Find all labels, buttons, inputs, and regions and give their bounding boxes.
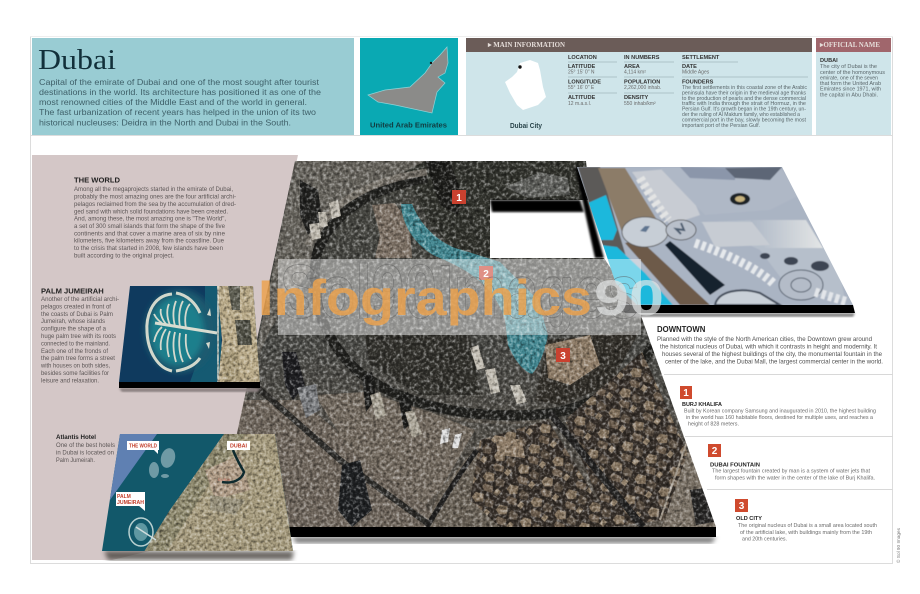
label: dubai: DUBAI xyxy=(230,444,248,450)
fronds xyxy=(154,301,191,362)
photo: downtown Dubai aerial block xyxy=(210,155,730,537)
body: the world: Among all the megaprojects started in the emirate of Dubai, xyxy=(74,187,233,193)
header: official name: ▸OFFICIAL NAME xyxy=(819,40,880,49)
dark skylights xyxy=(760,253,770,259)
body: Atlantis Hotel: in Dubai is located on xyxy=(56,450,114,456)
title: Dubai xyxy=(38,44,116,76)
column: settlement xyxy=(682,55,808,129)
heading: Dubai Fountain: DUBAI FOUNTAIN xyxy=(710,462,760,468)
official name text xyxy=(820,58,886,98)
column: in numbers: AREA xyxy=(624,64,640,70)
label: the world xyxy=(127,441,159,454)
panel: left pink background xyxy=(32,155,298,560)
column: in numbers: IN NUMBERS xyxy=(624,55,660,61)
promenade xyxy=(598,168,656,231)
body: downtown: Planned with the style of the North American cities, the Downtown grew around xyxy=(657,337,872,343)
official name text: that form the United Arab xyxy=(820,81,881,87)
body: palm jumeirah: the palm tree forms a street xyxy=(41,356,115,362)
watermark: Infographics xyxy=(258,270,592,326)
column: location: 55° 16' 0'' E xyxy=(568,85,595,91)
road top arc xyxy=(315,178,652,415)
body: downtown: houses several of the highest buildings of the city, the monumental fountain in the xyxy=(662,352,883,358)
label: palm jumeirah: JUMEIRAH xyxy=(117,500,144,506)
photo: Dubai Mall block xyxy=(570,160,860,313)
column: settlement: Persian Gulf. It's growth began in the 19th century, un- xyxy=(682,107,806,113)
column: settlement: DATE xyxy=(682,64,697,70)
body: palm jumeirah: pelagos created in front of xyxy=(41,304,111,310)
map label: United Arab Emirates xyxy=(370,120,447,130)
label: palm jumeirah: PALM xyxy=(117,494,131,500)
body: Old City: of the artificial lake, with buildings mainly from the 19th xyxy=(740,530,872,536)
intro text: destinations in the world. Its architecture has positioned it as one of the xyxy=(39,87,321,97)
body: Burj Khalifa xyxy=(684,408,876,428)
body: Burj Khalifa: Built by Korean company Samsung and inaugurated in 2010, the highest building xyxy=(684,408,876,414)
body: palm jumeirah xyxy=(40,297,119,384)
credit: © Sol 90 Images xyxy=(895,527,901,563)
heading: Burj Khalifa: BURJ KHALIFA xyxy=(682,402,723,408)
body: palm jumeirah: the coasts of Dubai is Palm xyxy=(41,312,113,318)
marker 2 on photo: 2 xyxy=(483,269,489,280)
body: palm jumeirah: huge palm tree with its roots xyxy=(41,334,116,340)
map label: Dubai City xyxy=(510,121,543,130)
column: location: 25° 15' 0'' N xyxy=(568,70,595,76)
body: Atlantis Hotel xyxy=(56,443,115,464)
body: Dubai Fountain: form shapes with the water in the center of the lake of Burj Khalifa. xyxy=(715,476,875,482)
body: the world xyxy=(74,187,236,259)
old city buildings xyxy=(495,335,600,458)
watermark: 90 xyxy=(594,270,664,326)
text block: Atlantis Hotel xyxy=(56,434,115,464)
body: Burj Khalifa: in the world has 160 habitable floors, destined for multiple uses, and reaches a xyxy=(686,415,873,421)
body: palm jumeirah: connected to the mainland. xyxy=(41,341,110,347)
body: downtown: center of the lake, and the Dubai Mall, the largest commercial center in the world. xyxy=(665,360,883,366)
icon: Dubai city map xyxy=(505,60,546,110)
body: the world: probably the most amazing ones are the four artificial archi- xyxy=(74,194,236,200)
column: location: LATITUDE xyxy=(568,64,596,70)
column: settlement: The first settlements in this coastal zone of the Arabic xyxy=(682,85,808,91)
official name text: Emirates since 1971, with xyxy=(820,86,881,92)
column: in numbers: POPULATION xyxy=(624,80,660,86)
body: palm jumeirah: Another of the artificial archi- xyxy=(41,297,119,303)
item 2: Dubai Fountain xyxy=(708,444,875,482)
block side xyxy=(217,527,716,537)
curved mall roofs xyxy=(632,168,700,225)
column: in numbers: 2,262,000 inhab. xyxy=(624,85,661,91)
body: the world: kilometers, five kilometers away from the coastline. Due xyxy=(74,239,225,245)
land xyxy=(217,286,262,384)
marker 3 on photo: 3 xyxy=(560,351,566,362)
body: Old City: and 20th centuries. xyxy=(742,536,787,542)
heading: Old City: OLD CITY xyxy=(736,516,762,522)
official name text: center of the homonymous xyxy=(820,70,886,76)
round roofs xyxy=(622,217,668,247)
body: palm jumeirah: Jumeirah, whose islands xyxy=(41,319,105,325)
column: settlement: important port of the Persian Gulf. xyxy=(682,123,760,129)
body: Burj Khalifa: height of 828 meters. xyxy=(688,422,739,428)
tower shadows xyxy=(425,161,462,215)
text block: the world xyxy=(74,176,236,259)
body: the world: ged sand with which solid foundations have been created. xyxy=(74,209,228,215)
number badge 1: 1 xyxy=(683,388,689,399)
body: palm jumeirah: leisure and relaxation. xyxy=(41,378,99,384)
photo: regional map block: DUBAI xyxy=(218,477,230,482)
column: location xyxy=(568,55,617,107)
column: settlement: commercial port in the bay, slowly becoming the most xyxy=(682,117,807,123)
number badge 3: 3 xyxy=(739,501,745,512)
panel: official name xyxy=(816,38,891,135)
body: palm jumeirah: with houses on both sides, xyxy=(40,364,110,370)
column: settlement: peninsula have their origin in the medieval age thanks xyxy=(682,90,807,96)
icon: UAE map shape xyxy=(368,47,448,113)
body: Atlantis Hotel: One of the best hotels xyxy=(56,443,115,449)
body: downtown: the historical nucleus of Dubai, with which it contrasts in height and modernity. It xyxy=(660,344,877,350)
number badge 2: 2 xyxy=(712,446,718,457)
number badge 3 xyxy=(735,499,748,512)
column: location: LOCATION xyxy=(568,55,597,61)
parking xyxy=(505,172,570,198)
column: settlement: to the production of pearls and the dense commercial xyxy=(682,96,806,102)
column: in numbers xyxy=(624,55,674,107)
heading: Atlantis Hotel: Atlantis Hotel xyxy=(56,434,96,441)
label: the world: THE WORLD xyxy=(129,444,157,450)
text block: downtown xyxy=(657,325,883,366)
low rise district xyxy=(565,352,700,527)
watermark: Sol90Images xyxy=(280,250,640,335)
official name text: The city of Dubai is the xyxy=(820,64,877,70)
text block: palm jumeirah xyxy=(40,286,119,384)
panel: main information xyxy=(466,38,812,135)
body: palm jumeirah: Each one of the fronds of xyxy=(41,349,108,355)
number badge 2 xyxy=(708,444,721,457)
body: the world: pelagos reclaimed from the sea by the accumulation of dred- xyxy=(74,202,236,208)
body: the world: And, among these, the most amazing one is "The World", xyxy=(74,216,226,222)
photo: Palm Jumeirah block xyxy=(115,280,265,392)
column: location: ALTITUDE xyxy=(568,95,596,101)
column: settlement: Middle Ages xyxy=(682,70,710,76)
lower left lot xyxy=(237,400,431,527)
crescent xyxy=(147,294,172,371)
top-left lighter zone xyxy=(244,161,425,400)
map shadow xyxy=(104,551,294,560)
body: the world: built according to the original project. xyxy=(74,253,174,259)
striped roofs xyxy=(695,243,775,285)
official name text: the capital in Abu Dhabi. xyxy=(820,92,878,98)
lake xyxy=(401,204,548,374)
pool xyxy=(588,195,617,240)
marker 1 on photo: 1 xyxy=(456,193,462,204)
intro text: The fast urbanization of recent years has helped in the union of its two xyxy=(39,107,316,117)
mall shadow xyxy=(625,313,855,317)
column: in numbers: 550 inhab/km² xyxy=(624,101,656,107)
islands xyxy=(149,448,176,478)
light roof xyxy=(738,220,844,299)
panel: title and introduction xyxy=(32,38,354,135)
roads lower xyxy=(258,388,430,525)
number badge 1 xyxy=(680,386,692,399)
item 1: Burj Khalifa xyxy=(680,386,876,428)
intro text: historical nucleuses: Deidra in the North and Dubai in the South. xyxy=(39,118,291,128)
body: the world: to the crisis that started in 2008, few islands have been xyxy=(74,246,223,252)
column: settlement: FOUNDERS xyxy=(682,80,714,86)
body: palm jumeirah: configure the shape of a xyxy=(41,327,107,333)
body: downtown xyxy=(657,337,883,366)
body: the world: continents and that cover a marine area of six by nine xyxy=(74,231,226,237)
heading: the world: THE WORLD xyxy=(74,176,120,184)
official name text: emirate, one of the seven xyxy=(820,76,878,82)
body: Dubai Fountain xyxy=(712,468,875,482)
body: palm jumeirah: besides some facilities for xyxy=(41,371,109,377)
body: Old City: The original nucleus of Dubai is a small area located south xyxy=(738,523,877,529)
marker 1 on photo xyxy=(452,190,466,204)
intro text xyxy=(39,77,321,128)
marker 2 on photo xyxy=(479,266,493,280)
towers xyxy=(297,200,527,448)
body: Dubai Fountain: The largest fountain created by man is a system of water jets that xyxy=(712,468,871,474)
column: location: LONGITUDE xyxy=(568,80,601,86)
column: settlement: der the ruling of Al Maktum family, who established a xyxy=(682,112,800,118)
intro text: Capital of the emirate of Dubai and one of the most sought after tourist xyxy=(39,77,320,87)
dark block inside ring xyxy=(365,335,480,395)
sand plot xyxy=(372,203,412,258)
label: dubai xyxy=(227,441,250,450)
hole in block xyxy=(490,200,604,258)
header: main information: ▸ MAIN INFORMATION xyxy=(487,40,566,49)
icon: Dubai location dot xyxy=(430,62,432,64)
panel: UAE map xyxy=(360,38,458,135)
central lot xyxy=(315,392,475,505)
heading: downtown: DOWNTOWN xyxy=(657,325,706,334)
photo: regional map block xyxy=(102,434,293,551)
label: palm jumeirah xyxy=(116,492,145,511)
dark top right district xyxy=(400,161,590,265)
official name text: DUBAI xyxy=(820,58,838,64)
marker 3 on photo xyxy=(556,348,570,362)
heading: palm jumeirah: PALM JUMEIRAH xyxy=(41,286,104,296)
canal xyxy=(665,241,725,295)
column: settlement: SETTLEMENT xyxy=(682,55,720,61)
intro text: most renowned cities of the Middle East and of the world in general. xyxy=(39,97,307,107)
city 3D base shadow xyxy=(292,537,716,543)
body: the world: a set of 300 small islands that form the shape of the five xyxy=(74,224,226,230)
column: in numbers: DENSITY xyxy=(624,95,649,101)
item 3: Old City xyxy=(735,499,877,542)
column: settlement: traffic with India through the strait of Hormuz, in the xyxy=(682,101,806,107)
body: Atlantis Hotel: Palm Jumeirah. xyxy=(56,458,95,464)
column: location: 12 m.a.s.l. xyxy=(568,101,591,107)
body: Old City xyxy=(738,523,877,542)
column: in numbers: 4,114 km² xyxy=(624,70,646,76)
